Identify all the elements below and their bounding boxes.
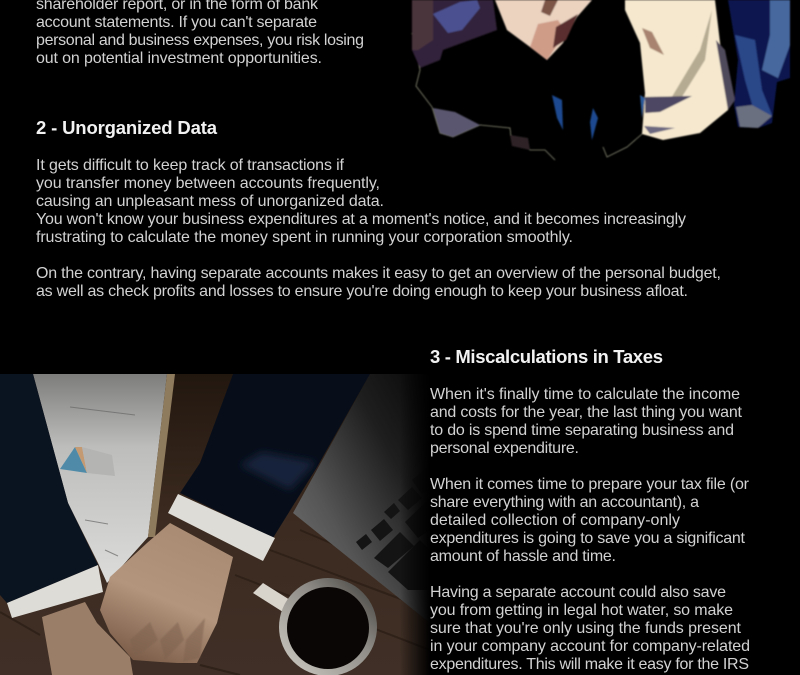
right cuff [168,494,275,561]
left sleeve [0,374,98,603]
keyboard keys [356,465,430,590]
upper hand [100,523,233,663]
paragraph: separate accounts [36,265,721,300]
paragraph: calculating income: personal expenditure. [430,440,579,457]
pie chart on document [60,447,87,473]
document [33,374,167,583]
document text [70,407,135,556]
paragraph: tax file: When it comes time to prepare your tax file (or [430,476,750,493]
edge fade [0,374,430,675]
paragraph: unorganized data: causing an unpleasant mess of unorganized data. [36,193,384,210]
paragraph: tax file: expenditures is going to save you a significant [430,530,746,547]
paragraph: section 1 ending [36,0,364,67]
paragraph: tax file: amount of hassle and time. [430,548,616,565]
desk [0,374,430,675]
heading: 3 - Miscalculations in Taxes: 3 - Miscalculations in Taxes [430,346,663,367]
paragraph: calculating income: to do is spend time separating business and [430,422,734,439]
paragraph: tax file: detailed collection of company-only [430,512,680,529]
paragraph: section 1 ending: personal and business expenses, you risk losing [36,32,364,49]
right sleeve [180,374,370,538]
paragraph: legal protection: you from getting in legal hot water, so make [430,602,733,619]
paragraph: legal protection [430,584,750,673]
paragraph: legal protection: expenditures. This will make it easy for the IRS [430,656,749,673]
paragraph: unorganized data: You won't know your business expenditures at a moment's notice, and it becomes increasingly [36,211,686,228]
paragraph: section 1 ending: out on potential investment opportunities. [36,50,322,67]
paragraph: unorganized data: It gets difficult to keep track of transactions if [36,157,345,174]
heading: 2 - Unorganized Data: 2 - Unorganized Data [36,117,218,138]
paragraph: section 1 ending: account statements. If you can't separate [36,14,317,31]
laptop [293,374,430,623]
paragraph: legal protection: in your company account for company-related [430,638,750,655]
paragraph: unorganized data: frustrating to calculate the money spent in running your corporation smoothly. [36,229,573,246]
paragraph: separate accounts: On the contrary, having separate accounts makes it easy to get an overview of the personal budget, [36,265,721,282]
paragraph: unorganized data: you transfer money between accounts frequently, [36,175,380,192]
coffee cup [253,578,377,675]
paragraph: calculating income: When it's finally time to calculate the income [430,386,740,403]
lower hand [42,602,133,675]
illustration: stylised businessman [412,0,790,160]
paragraph: unorganized data [36,157,686,246]
paragraph: tax file [430,476,750,565]
paragraph: legal protection: Having a separate account could also save [430,584,726,601]
paragraph: legal protection: sure that you're only using the funds present [430,620,742,637]
paragraph: tax file: share everything with an accountant), a [430,494,699,511]
paragraph: calculating income [430,386,743,457]
paragraph: calculating income: and costs for the year, the last thing you want [430,404,743,421]
paragraph: separate accounts: as well as check profits and losses to ensure you're doing enough to keep your business afloat. [36,283,688,300]
left cuff [7,565,103,618]
photo: businessman hands at desk [0,374,430,675]
jacket outline [412,33,642,160]
